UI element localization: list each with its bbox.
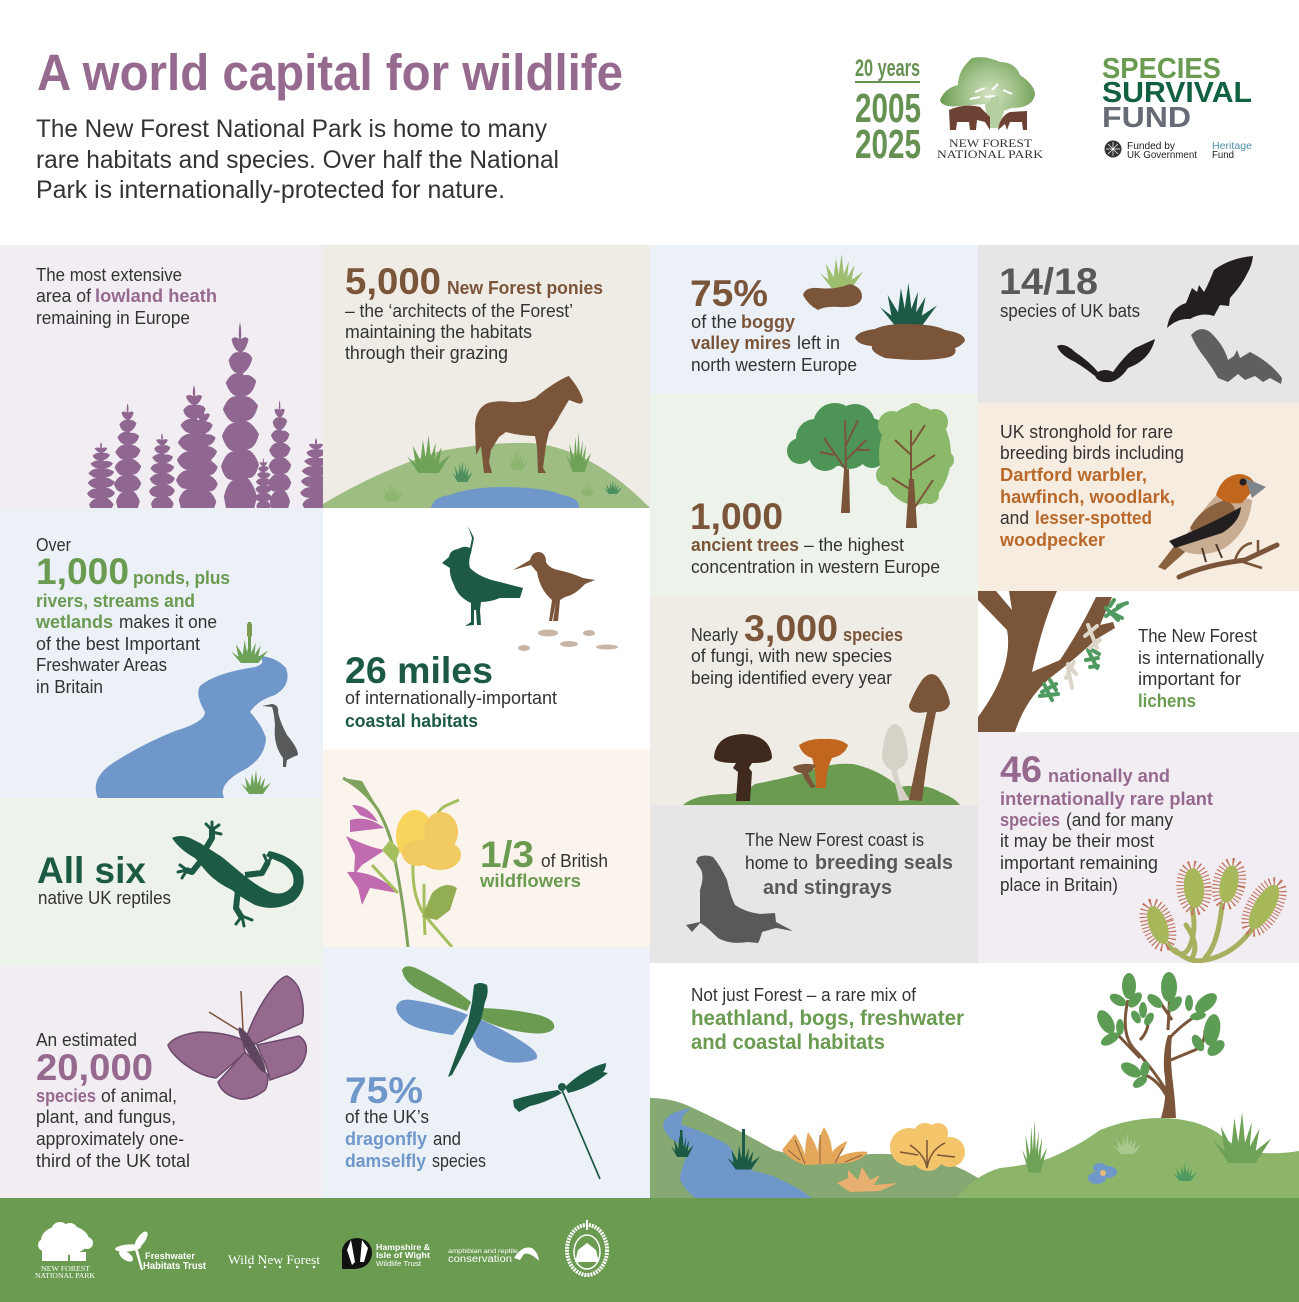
footer logo: Verderers crest — [567, 1220, 607, 1275]
panel: wildflowers — [323, 750, 650, 947]
icon: heather — [87, 322, 332, 512]
panel: boggy valley mires: boggy — [741, 312, 795, 332]
footer logo: Freshwater Habitats Trust: Habitats Trust — [143, 1261, 207, 1272]
panel: ponds and wetlands: Freshwater Areas — [36, 655, 167, 675]
panel: butterfly, 20,000 species — [0, 966, 323, 1198]
panel: rare plants: nationally and — [1048, 766, 1170, 786]
icon: tree — [1093, 972, 1228, 1118]
panel: lowland heath: area of — [36, 286, 92, 306]
title: A world capital for wildlife — [37, 44, 623, 101]
panel: ponies: – the ‘architects of the Forest’ — [345, 301, 573, 321]
panel: lichens: is internationally — [1138, 648, 1264, 668]
intro text: The New Forest National Park is home to many — [36, 115, 547, 143]
panel: ponds and wetlands: of the best Important — [36, 634, 200, 654]
panel: dragonflies: species — [432, 1151, 486, 1171]
footer logo: Amphibian and Reptile Conservation — [448, 1247, 539, 1265]
panel: rare breeding birds: lesser-spotted — [1035, 508, 1152, 528]
panel: fungi: Nearly — [691, 625, 738, 645]
illustration: hill, pond and pony — [323, 376, 650, 508]
panel: butterfly, 20,000 species: An estimated — [36, 1030, 137, 1050]
icon: grasses and flower — [1022, 1112, 1271, 1184]
icon: yellow bush — [890, 1123, 965, 1171]
icon: bats — [1057, 256, 1282, 384]
intro text: Park is internationally-protected for nature. — [36, 176, 505, 204]
panel: rare plants: important remaining — [1000, 853, 1158, 873]
panel: ancient trees — [650, 394, 978, 595]
footer logo: New Forest National Park: NEW FOREST — [41, 1265, 91, 1273]
icon: hawfinch — [1158, 474, 1277, 577]
panel: boggy valley mires: north western Europe — [691, 355, 857, 375]
panel: wildflowers: of British — [541, 851, 608, 871]
panel: ponds and wetlands — [0, 508, 323, 798]
panel: butterfly, 20,000 species: species — [36, 1086, 96, 1106]
logo: Species Survival Fund: FUND — [1102, 102, 1191, 134]
panel: ponies — [323, 245, 650, 508]
panel: bats: 14/18 — [999, 261, 1098, 302]
panel: ponies: 5,000 — [345, 261, 441, 302]
panel: wildflowers: wildflowers — [479, 871, 581, 891]
logo: Species Survival Fund: Heritage — [1212, 140, 1252, 152]
footer logo: Hampshire and Isle of Wight Wildlife Trust: Isle of Wight — [376, 1251, 430, 1260]
panel: ancient trees: – the highest — [804, 535, 904, 555]
panel: ponies: through their grazing — [345, 343, 508, 363]
panel: wildflowers: 1/3 — [480, 834, 534, 875]
panel: lowland heath: The most extensive — [36, 265, 182, 285]
panel: ancient trees: concentration in western Europe — [691, 557, 940, 577]
illustration: landscape — [650, 972, 1299, 1198]
panel: ancient trees: ancient trees — [691, 535, 799, 555]
panel: butterfly, 20,000 species: third of the UK total — [36, 1151, 190, 1171]
panel: seals and stingrays: breeding seals — [815, 852, 953, 874]
logo: 20 years 2005 2025 — [855, 55, 921, 167]
panel: rare mix of habitats: Not just Forest – a rare mix of — [691, 985, 917, 1005]
icon: mushrooms on a mound — [683, 674, 960, 805]
logo: 20 years 2005 2025: 2005 — [855, 85, 921, 131]
panel: boggy valley mires: left in — [797, 333, 840, 353]
panel: lichens: lichens — [1138, 691, 1196, 711]
panel: dragonflies: and — [433, 1129, 461, 1149]
icon: damselfly — [513, 1063, 608, 1179]
panel: ponies: New Forest ponies — [447, 278, 603, 298]
panel: lichens: important for — [1138, 669, 1241, 689]
panel: rare mix of habitats — [650, 963, 1299, 1198]
icon: sundew plant — [1143, 864, 1285, 961]
panel: ponds and wetlands: ponds, plus — [133, 568, 230, 588]
footer logo: Amphibian and Reptile Conservation: conservation — [448, 1254, 512, 1265]
footer logo: Freshwater Habitats Trust — [115, 1230, 207, 1272]
panel: butterfly, 20,000 species: of animal, — [101, 1086, 177, 1106]
panel: ponds and wetlands: wetlands — [35, 612, 113, 632]
icon: lizard — [172, 822, 304, 926]
panel: boggy valley mires: of the — [691, 312, 737, 332]
icon: reeds — [671, 1129, 760, 1170]
panel: fungi: species — [843, 625, 903, 645]
logo: Species Survival Fund: Fund — [1212, 149, 1234, 161]
panel: seals and stingrays: The New Forest coast is — [745, 830, 924, 850]
icon: seal — [686, 856, 793, 943]
footer logo: Wild New Forest: Wild New Forest — [228, 1252, 320, 1267]
footer logo: Hampshire and Isle of Wight Wildlife Trust — [342, 1238, 430, 1269]
panel: reptiles: native UK reptiles — [38, 888, 171, 908]
logo: Species Survival Fund — [1102, 53, 1252, 161]
logo: Species Survival Fund: UK Government — [1127, 149, 1197, 161]
panel: seals and stingrays — [650, 805, 978, 963]
panel: ponds and wetlands: Over — [36, 535, 71, 555]
panel: rare mix of habitats: heathland, bogs, freshwater — [691, 1007, 964, 1030]
panel: boggy valley mires — [650, 245, 978, 394]
panel: lowland heath: remaining in Europe — [36, 308, 190, 328]
panel: coastal habitats: of internationally-important — [345, 688, 557, 708]
panel: butterfly, 20,000 species: approximately one- — [36, 1129, 184, 1149]
panel: butterfly, 20,000 species: 20,000 — [36, 1047, 153, 1088]
panel: fungi: being identified every year — [691, 668, 892, 688]
panel: butterfly, 20,000 species: plant, and fungus, — [36, 1107, 176, 1127]
panel: coastal habitats — [323, 508, 650, 750]
panel: ponies: maintaining the habitats — [345, 322, 532, 342]
panel: lichens: The New Forest — [1138, 626, 1257, 646]
panel: dragonflies: damselfly — [345, 1151, 426, 1171]
panel: rare breeding birds: UK stronghold for rare — [1000, 422, 1173, 442]
panel: coastal habitats: 26 miles — [345, 650, 493, 691]
footer band — [0, 1198, 1299, 1302]
illustration: river, heron and reeds — [96, 622, 298, 798]
intro text — [36, 115, 559, 204]
panel: rare breeding birds: woodpecker — [999, 530, 1105, 550]
logo: New Forest National Park — [937, 57, 1043, 161]
logo: 20 years 2005 2025: 20 years — [855, 55, 920, 82]
panel: dragonflies: 75% — [345, 1070, 423, 1111]
panel: lowland heath — [0, 245, 332, 512]
panel: ponds and wetlands: makes it one — [119, 612, 217, 632]
icon: moss clumps — [803, 254, 965, 360]
panel: lowland heath: lowland heath — [95, 286, 217, 306]
panel: ponds and wetlands: in Britain — [36, 677, 103, 697]
icon: two trees — [787, 403, 954, 527]
footer logo: New Forest National Park — [35, 1222, 95, 1280]
logo: Species Survival Fund: SURVIVAL — [1102, 77, 1252, 109]
panel: rare plants: 46 — [1000, 749, 1042, 790]
panel: fungi — [650, 595, 978, 805]
panel: dragonflies: dragonfly — [345, 1129, 427, 1149]
panel: seals and stingrays: and stingrays — [763, 877, 892, 899]
panel: rare plants: it may be their most — [1000, 831, 1154, 851]
panel: coastal habitats: coastal habitats — [345, 711, 478, 731]
panel: ancient trees: 1,000 — [690, 496, 783, 537]
icon: dragonfly — [396, 966, 554, 1077]
intro text: rare habitats and species. Over half the National — [36, 146, 559, 174]
icon: wildflowers — [343, 778, 461, 947]
panel: bats: species of UK bats — [1000, 301, 1140, 321]
panel: rare plants: (and for many — [1066, 810, 1173, 830]
icon: orange shrubs — [782, 1127, 898, 1192]
panel: fungi: 3,000 — [744, 608, 838, 649]
logo: Species Survival Fund: SPECIES — [1102, 53, 1221, 85]
panel: rare breeding birds: breeding birds including — [1000, 443, 1184, 463]
footer logo: New Forest National Park: NATIONAL PARK — [35, 1272, 95, 1280]
panel: dragonflies: of the UK’s — [345, 1107, 429, 1127]
panel: rare breeding birds: Dartford warbler, — [1000, 465, 1147, 485]
logo: New Forest National Park: NATIONAL PARK — [937, 147, 1043, 161]
icon: tree branch with lichens — [978, 591, 1127, 732]
panel: seals and stingrays: home to — [745, 853, 808, 873]
panel: rare breeding birds: and — [1000, 508, 1029, 528]
panel: rare breeding birds — [978, 403, 1299, 591]
panel: rare plants: place in Britain) — [1000, 875, 1118, 895]
panel: reptiles — [0, 798, 323, 966]
panel: rare plants: internationally rare plant — [1000, 789, 1213, 809]
panel: rare breeding birds: hawfinch, woodlark, — [1000, 487, 1175, 507]
panel: lichens — [978, 591, 1299, 732]
footer logo: Hampshire and Isle of Wight Wildlife Trust: Hampshire & — [376, 1243, 430, 1252]
panel: rare plants: species — [1000, 810, 1060, 830]
footer logo: Freshwater Habitats Trust: Freshwater — [145, 1251, 196, 1261]
footer logo: Amphibian and Reptile Conservation: amphibian and reptile — [448, 1249, 519, 1255]
panel: rare plants — [978, 732, 1299, 963]
logo: New Forest National Park: NEW FOREST — [949, 136, 1033, 150]
logo: Species Survival Fund: Funded by — [1127, 140, 1176, 152]
icon: lapwing and redshank — [442, 526, 618, 651]
panel: boggy valley mires: valley mires — [691, 333, 791, 353]
panel: fungi: of fungi, with new species — [691, 646, 892, 666]
logo: 20 years 2005 2025: 2025 — [855, 121, 921, 167]
panel: dragonflies — [323, 947, 650, 1198]
panel: ponds and wetlands: rivers, streams and — [36, 591, 195, 611]
panel: bats — [978, 245, 1299, 403]
panel: reptiles: All six — [37, 850, 146, 891]
panel: ponds and wetlands: 1,000 — [36, 551, 129, 592]
footer logo: Hampshire and Isle of Wight Wildlife Trust: Wildlife Trust — [376, 1261, 421, 1268]
panel: boggy valley mires: 75% — [690, 273, 768, 314]
icon: butterfly — [168, 976, 306, 1099]
panel: rare mix of habitats: and coastal habitats — [691, 1031, 885, 1054]
